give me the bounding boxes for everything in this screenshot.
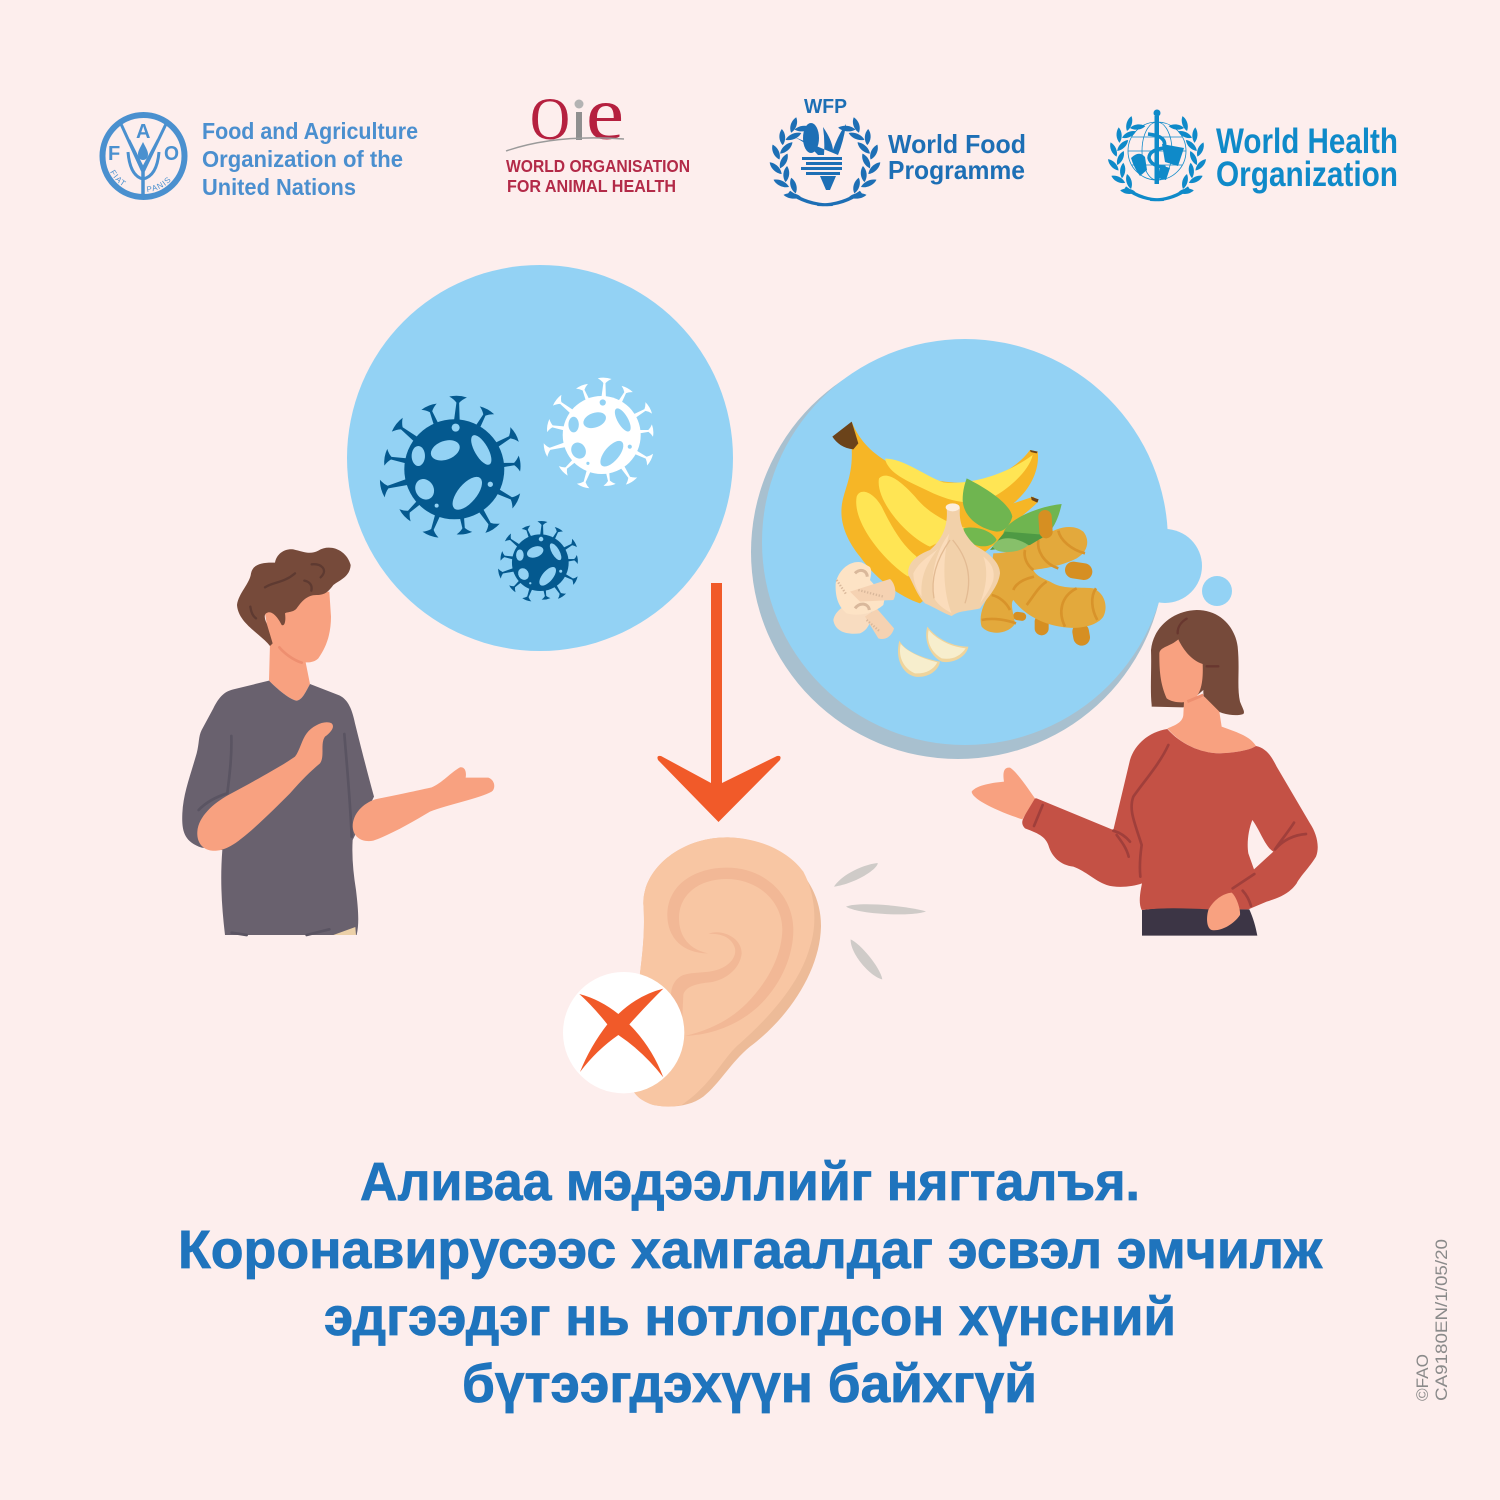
WFP emblem [768, 96, 882, 206]
main heading [178, 1152, 1323, 1414]
icon: large dark virus [379, 395, 521, 539]
WFP name: Programme [888, 155, 1025, 185]
arrow: pointing down to ear [657, 583, 781, 822]
sweater [1022, 729, 1318, 910]
ginger root [981, 527, 1106, 633]
icon: small dark virus [497, 521, 578, 602]
garlic cloves [898, 627, 968, 677]
extended arm [353, 767, 494, 841]
WFP emblem: WFP [804, 96, 847, 118]
FAO name: United Nations [202, 174, 356, 200]
OIE name: FOR ANIMAL HEALTH [507, 176, 676, 196]
hair strands [250, 564, 324, 618]
FAO name: Food and Agriculture [202, 118, 418, 144]
waistband [333, 927, 356, 935]
credit: document code: CA9180EN/1/05/20 [1432, 1239, 1451, 1401]
WHO name: World Health [1216, 122, 1398, 161]
logo: OIE [506, 72, 690, 196]
leaves [963, 478, 1062, 552]
FAO name: Organization of the [202, 146, 403, 172]
hair [237, 548, 351, 646]
OIE name: WORLD ORGANISATION [506, 156, 690, 176]
WFP name [888, 129, 1026, 185]
t-shirt [182, 681, 374, 935]
ginger rings [982, 531, 1097, 627]
white badge [563, 972, 684, 1093]
FAO emblem: F [108, 143, 120, 165]
OIE monogram [506, 72, 624, 156]
WFP name: World Food [888, 129, 1026, 159]
trousers [1142, 908, 1257, 936]
bubble tail large [1128, 529, 1202, 603]
FAO emblem [100, 112, 188, 200]
ear helix fold [667, 868, 793, 1036]
main heading: Коронавирусээс хамгаалдаг эсвэл эмчилж [178, 1220, 1323, 1280]
bubble shadow [751, 345, 1165, 759]
waist gap [1248, 820, 1273, 869]
bubble tail small [1202, 576, 1232, 606]
FAO emblem: A [136, 121, 150, 143]
main heading: бүтээгдэхүүн байхгүй [462, 1354, 1037, 1414]
ginger nubs [1017, 570, 1084, 637]
banana bunch [832, 422, 1039, 603]
icon: white virus [543, 377, 654, 489]
logo: WFP [768, 96, 1026, 206]
neck and chest [1167, 697, 1256, 753]
left bubble circle [347, 265, 733, 651]
OIE monogram: e [586, 72, 624, 156]
sweater folds [1034, 745, 1306, 906]
open hand [972, 768, 1035, 819]
FAO emblem: PANIS [146, 177, 170, 192]
thought bubble: foods [751, 339, 1232, 759]
speech bubble: virus [347, 265, 733, 651]
FAO name [202, 118, 418, 200]
OIE name [506, 156, 690, 196]
illustration: woman speaking [972, 610, 1318, 936]
hand on hip [1207, 893, 1240, 930]
shirt folds [199, 734, 352, 935]
bubble main [762, 339, 1168, 745]
OIE monogram: O [530, 86, 570, 152]
garlic bulb [908, 503, 1000, 616]
neck and face [265, 592, 331, 701]
logo: WHO [1106, 110, 1398, 201]
credit: document code [1413, 1239, 1451, 1401]
icon: red cross [579, 989, 663, 1077]
raised arm [197, 722, 333, 851]
foods illustration [832, 422, 1106, 677]
credit: document code: ©FAO [1413, 1354, 1432, 1401]
face [1159, 639, 1203, 702]
FAO emblem: O [164, 143, 179, 165]
ear main [628, 837, 814, 1107]
WHO name [1216, 122, 1398, 194]
hair strands [1178, 619, 1218, 666]
FAO emblem: FIAT [110, 170, 126, 186]
ginger top nub [1045, 517, 1046, 532]
hair [1151, 610, 1244, 715]
ear inner fold [671, 932, 742, 1017]
logo: FAO [100, 112, 418, 200]
neck shadow [1187, 695, 1203, 702]
chin shadow [279, 647, 302, 663]
main heading: Аливаа мэдээллийг нягталъя. [360, 1152, 1140, 1212]
WHO emblem [1106, 110, 1208, 201]
illustration: ear [563, 837, 926, 1107]
WHO name: Organization [1216, 155, 1398, 194]
ear outer rim [628, 837, 821, 1107]
illustration: man speaking [182, 548, 494, 935]
mushrooms [833, 562, 895, 639]
main heading: эдгээдэг нь нотлогдсон хүнсний [324, 1287, 1176, 1347]
sound lines [834, 863, 926, 979]
